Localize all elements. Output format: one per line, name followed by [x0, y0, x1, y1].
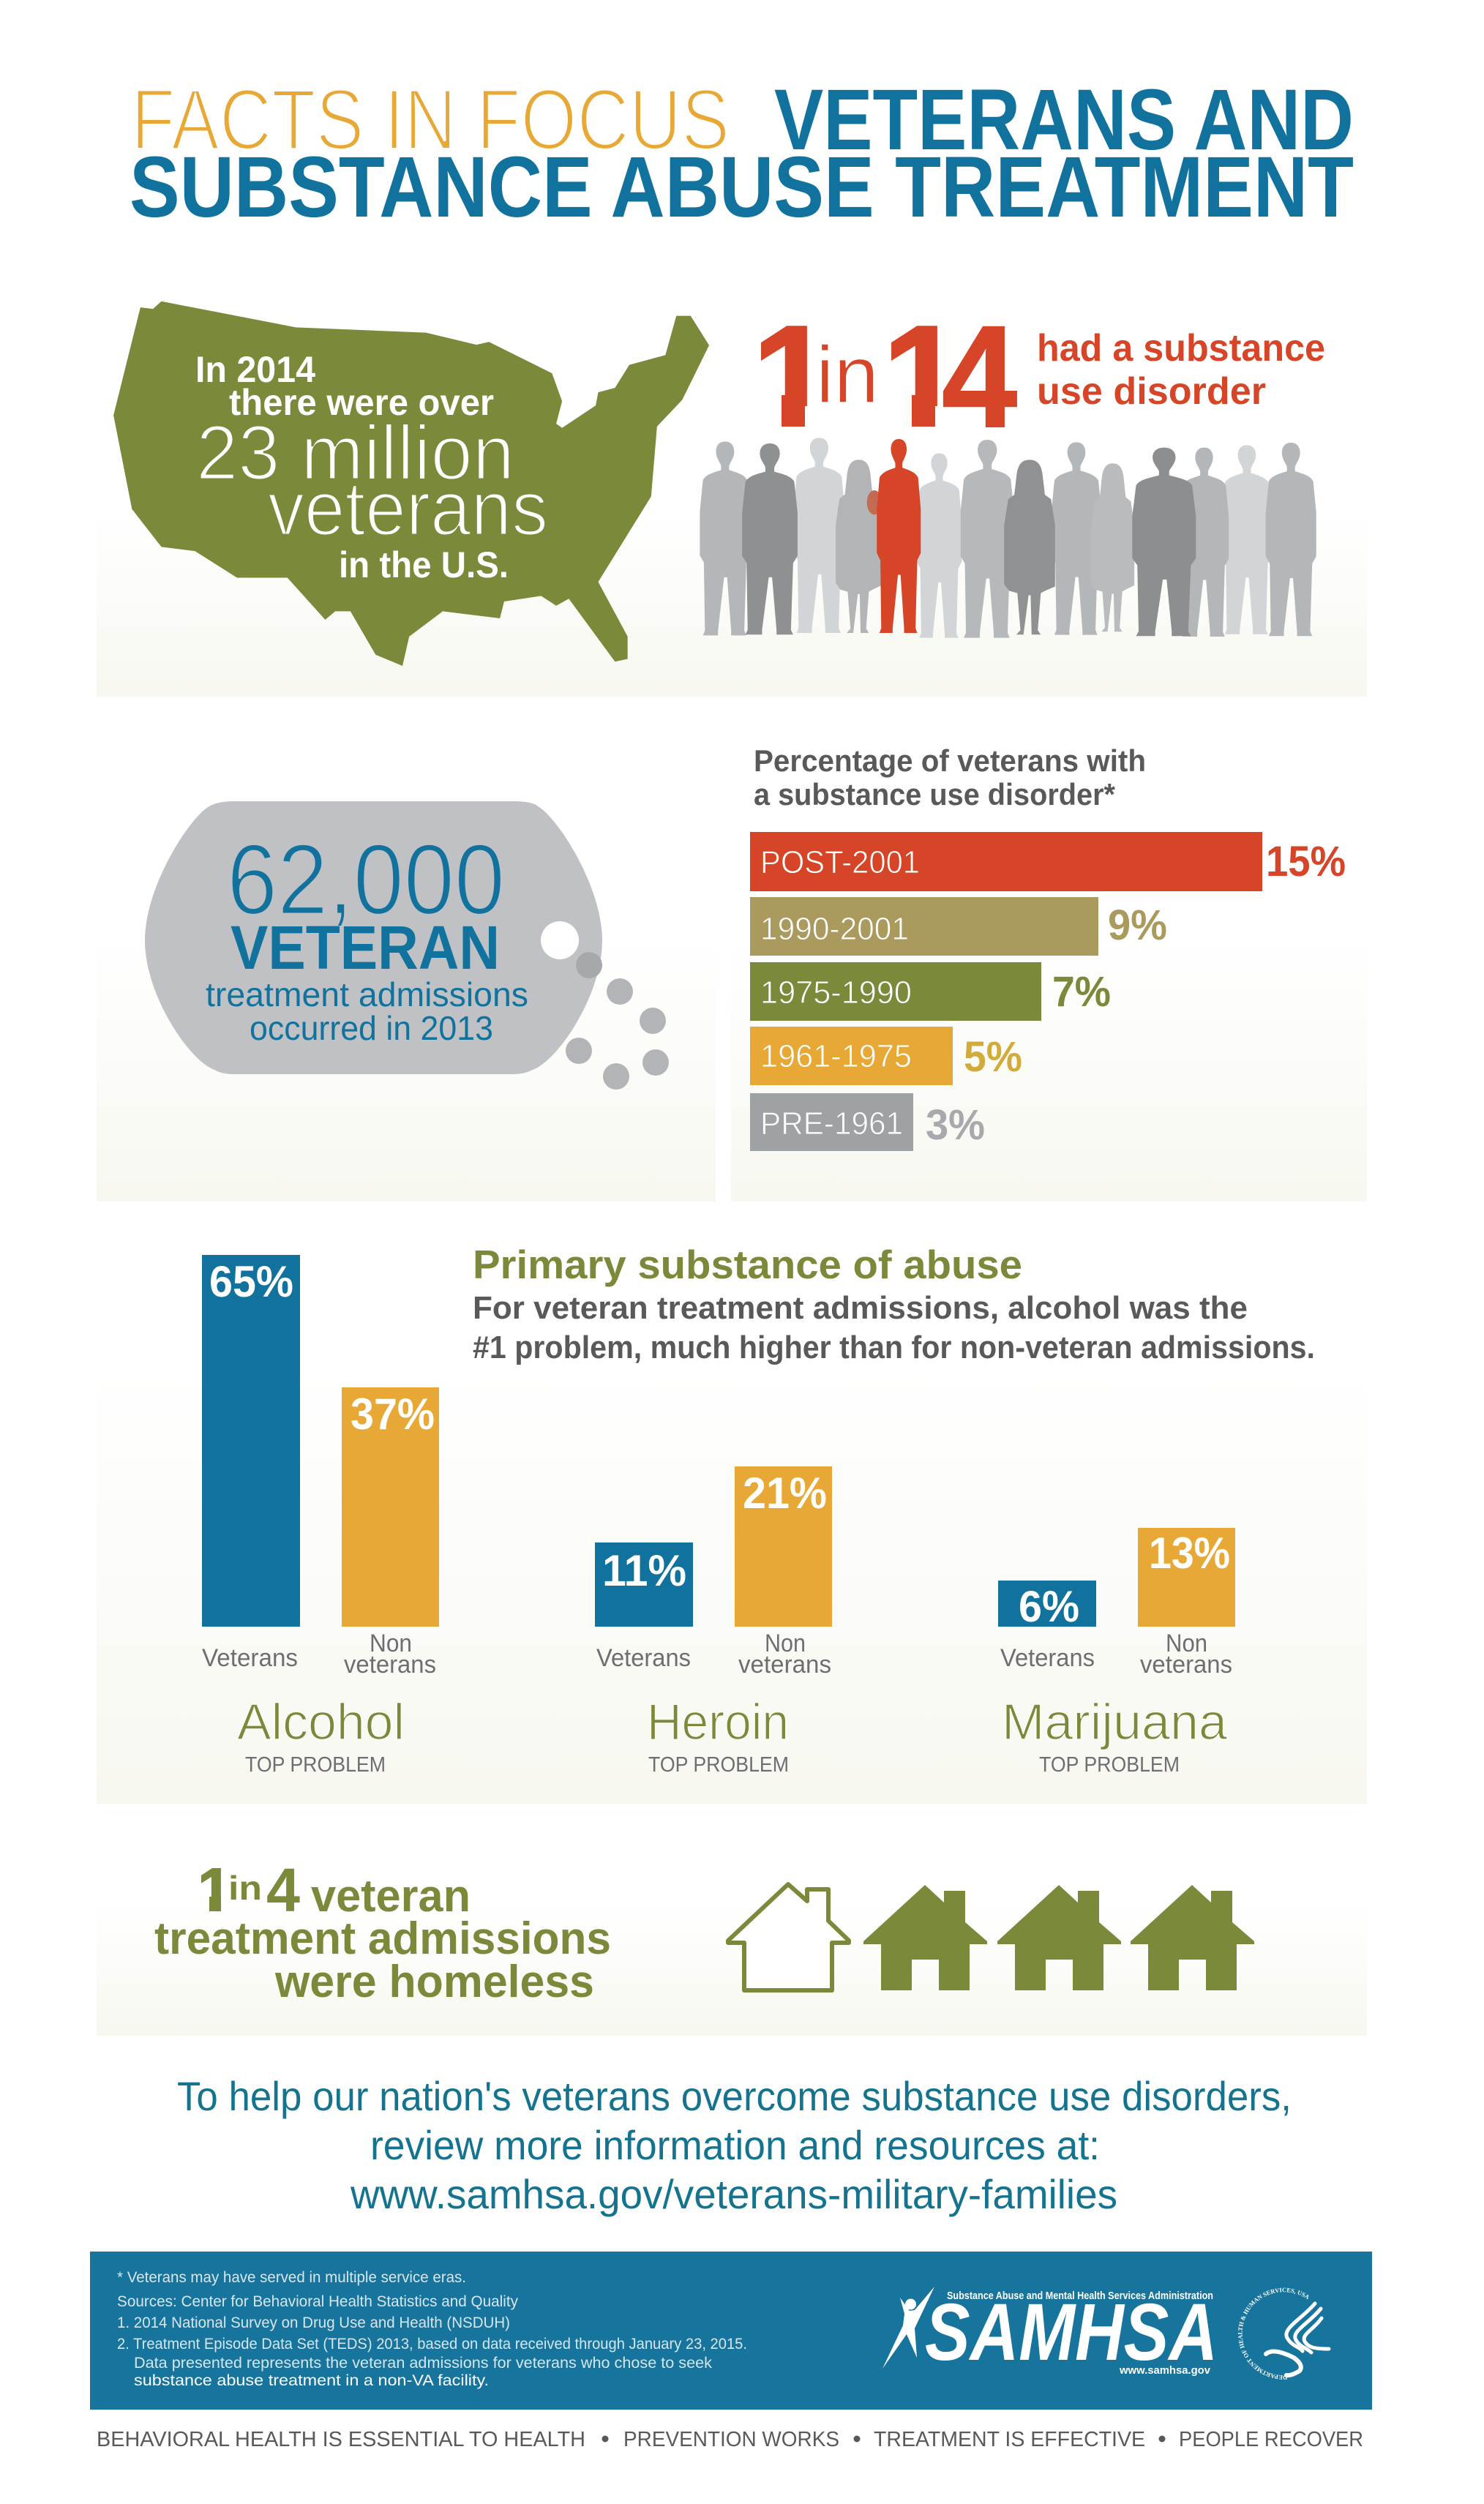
statistic: 1 in 14: had a substance: [1037, 327, 1325, 370]
panel: primary substance of abuse: [97, 1242, 1367, 1804]
icon: dog tag: [145, 801, 602, 1074]
section heading: #1 problem, much higher than for non-veteran admissions.: [473, 1330, 1315, 1365]
dog tag text: treatment admissions: [206, 975, 528, 1013]
chart group: marijuana: Non: [1166, 1630, 1207, 1657]
tagline: TREATMENT IS EFFECTIVE: [874, 2428, 1145, 2451]
bar: 1961-1975: [750, 1027, 1022, 1085]
bar: pre-1961: 3%: [926, 1101, 985, 1149]
map text: 23 million veterans: in the U.S.: [339, 544, 509, 585]
chart group: heroin: Non: [765, 1630, 806, 1657]
chart group: alcohol: 65%: [209, 1257, 293, 1306]
panel: percentage of veterans by service era: [731, 743, 1367, 1202]
icon: ball chain: [566, 952, 669, 1090]
bar: post-2001: 15%: [1266, 838, 1346, 885]
bar: 1961-1975: 1961-1975: [760, 1038, 912, 1074]
sources and notes: Sources: Center for Behavioral Health Statistics and Quality: [117, 2293, 518, 2310]
section heading: For veteran treatment admissions, alcohol was the: [473, 1290, 1248, 1326]
title: VETERANS AND: [774, 72, 1354, 168]
map text: 23 million veterans: veterans: [268, 465, 548, 552]
bar: pre-1961: [750, 1093, 985, 1151]
SAMHSA logo: SAMHSA: [925, 2287, 1218, 2377]
sources and notes: substance abuse treatment in a non-VA facility.: [134, 2372, 489, 2389]
statistic: 1 in 14: in: [816, 330, 879, 420]
chart group: marijuana: [998, 1528, 1235, 1777]
panel: dog tag treatment admissions: [97, 801, 716, 1202]
panel: homeless admissions: [97, 1856, 1367, 2036]
map text: 23 million veterans: [195, 349, 548, 585]
chart group: marijuana: 13%: [1149, 1529, 1230, 1578]
SAMHSA logo: Substance Abuse and Mental Health Services Administration: [947, 2290, 1213, 2302]
SAMHSA logo: www.samhsa.gov: [1119, 2364, 1211, 2377]
dog tag text: VETERAN: [231, 913, 500, 982]
chart group: alcohol: 37%: [351, 1390, 435, 1439]
map text: 23 million veterans: In 2014: [195, 349, 315, 390]
panel: veteran population: [97, 296, 1367, 697]
bar: post-2001: [750, 832, 1346, 891]
sources and notes: [117, 2269, 747, 2389]
icon: outlined house: [728, 1884, 849, 1990]
bar: 1990-2001: 1990-2001: [760, 911, 909, 947]
statement: 1 in 4 homeless: [155, 1868, 609, 1998]
tagline: PREVENTION WORKS: [623, 2428, 839, 2451]
map text: 23 million veterans: there were over: [229, 382, 494, 423]
statistic: 1 in 14: use disorder: [1037, 370, 1266, 413]
HHS seal: DEPARTMENT OF HEALTH & HUMAN SERVICES, USA: [1238, 2287, 1308, 2380]
section heading: [473, 1242, 1315, 1365]
statement: 1 in 4 homeless: 4: [266, 1856, 300, 1924]
bar: 1990-2001: 9%: [1108, 901, 1167, 949]
chart heading: a substance use disorder*: [754, 777, 1116, 811]
chart group: heroin: veterans: [738, 1651, 831, 1679]
bar: 1961-1975: 5%: [964, 1033, 1022, 1081]
bar: 1975-1990: 7%: [1052, 968, 1111, 1016]
chart group: alcohol: [202, 1255, 439, 1777]
sources and notes: * Veterans may have served in multiple service eras.: [117, 2269, 466, 2286]
chart heading: Percentage of veterans with: [754, 743, 1146, 778]
chart group: heroin: TOP PROBLEM: [648, 1753, 789, 1777]
chart group: marijuana: TOP PROBLEM: [1039, 1753, 1180, 1777]
bar: post-2001: POST-2001: [760, 844, 920, 880]
call to action: www.samhsa.gov/veterans-military-families: [350, 2171, 1117, 2217]
dog tag text: occurred in 2013: [250, 1009, 493, 1047]
chart group: heroin: 21%: [743, 1469, 827, 1518]
statement: 1 in 4 homeless: were homeless: [274, 1957, 594, 2007]
tagline: PEOPLE RECOVER: [1179, 2428, 1363, 2451]
dog tag text: 62,000: [227, 824, 505, 936]
sources and notes: 1. 2014 National Survey on Drug Use and Health (NSDUH): [117, 2314, 510, 2331]
bar: 1975-1990: 1975-1990: [760, 975, 912, 1011]
statistic: 1 in 14: 1: [752, 296, 833, 457]
title: FACTS IN FOCUS: [131, 72, 730, 168]
chart group: alcohol: veterans: [344, 1651, 436, 1679]
statement: 1 in 4 homeless: veteran: [311, 1871, 471, 1922]
map text: 23 million veterans: 23 million: [196, 410, 514, 496]
chart group: alcohol: Non: [370, 1630, 412, 1657]
chart group: marijuana: veterans: [1140, 1651, 1232, 1679]
icons: three solid houses: [863, 1885, 1254, 1990]
call to action: [177, 2073, 1292, 2217]
tagline: [97, 2428, 1363, 2451]
chart group: marijuana: 6%: [1019, 1582, 1079, 1631]
section heading: Primary substance of abuse: [473, 1242, 1022, 1287]
sources and notes: Data presented represents the veteran admissions for veterans who chose to seek: [134, 2355, 713, 2372]
chart heading: [754, 743, 1146, 811]
bar: pre-1961: PRE-1961: [760, 1106, 903, 1142]
chart group: heroin: [595, 1466, 832, 1777]
chart group: heroin: Heroin: [647, 1693, 789, 1750]
call to action: To help our nation's veterans overcome substance use disorders,: [177, 2073, 1292, 2119]
dog tag text: [206, 824, 528, 1047]
footer band: [90, 2252, 1372, 2410]
chart group: heroin: 11%: [602, 1546, 686, 1595]
statement: 1 in 4 homeless: treatment admissions: [154, 1913, 611, 1964]
sources and notes: 2. Treatment Episode Data Set (TEDS) 2013, based on data received through January 23, 2015.: [117, 2336, 747, 2353]
tagline: BEHAVIORAL HEALTH IS ESSENTIAL TO HEALTH: [97, 2428, 585, 2451]
statistic: 1 in 14: 4: [942, 296, 1017, 457]
chart group: alcohol: Alcohol: [237, 1693, 405, 1750]
statistic: 1 in 14: [761, 326, 1324, 427]
call to action: review more information and resources at:: [370, 2122, 1100, 2168]
bar: 1990-2001: [750, 897, 1167, 956]
chart group: alcohol: Veterans: [202, 1644, 298, 1672]
chart group: alcohol: TOP PROBLEM: [245, 1753, 386, 1777]
bar: 1975-1990: [750, 962, 1111, 1021]
chart group: heroin: Veterans: [596, 1644, 691, 1672]
statistic: 1 in 14: 1: [882, 296, 963, 457]
chart group: marijuana: Veterans: [1000, 1644, 1095, 1672]
statement: 1 in 4 homeless: in: [228, 1869, 262, 1907]
statement: 1 in 4 homeless: 1: [198, 1856, 232, 1924]
chart group: marijuana: Marijuana: [1002, 1693, 1227, 1750]
silhouettes of people, one highlighted red: [700, 438, 1316, 638]
title: [130, 72, 1354, 236]
map of the United States: [113, 301, 709, 666]
